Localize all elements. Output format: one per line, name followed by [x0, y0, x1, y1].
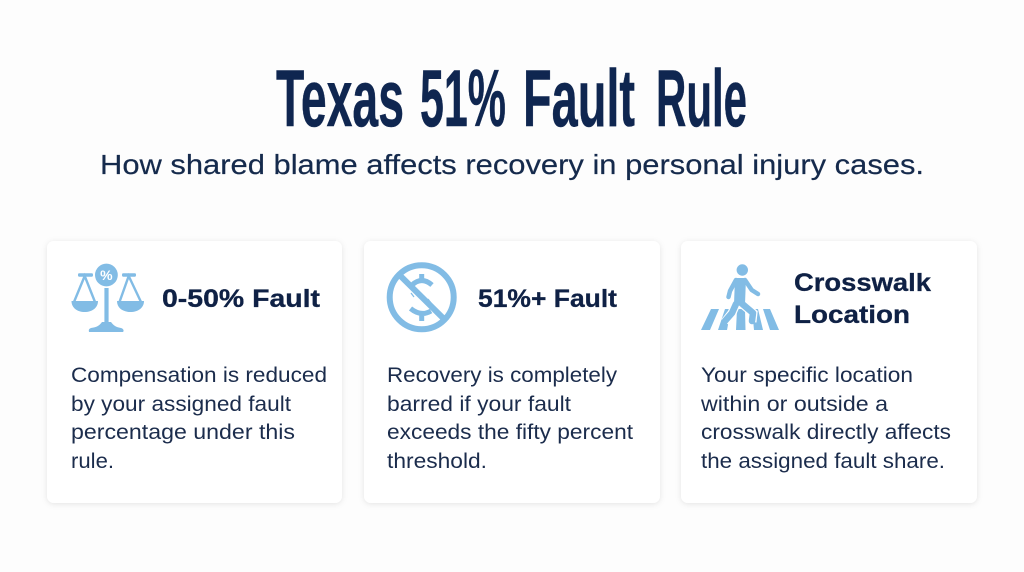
icon: scales with percent: [72, 264, 144, 332]
heading: 51%+ fault: 51%+ Fault: [478, 285, 618, 313]
heading: crosswalk location: [794, 269, 931, 329]
title: Rule: [656, 54, 747, 144]
body text: 0-50% fault: Compensation is reduced: [71, 363, 327, 387]
subtitle: How shared blame affects recovery in personal injury cases.: [100, 149, 924, 180]
body text: 51%+ fault: Recovery is completely: [387, 363, 617, 387]
body text: crosswalk location: crosswalk directly affects: [701, 420, 951, 444]
body text: crosswalk location: the assigned fault share.: [701, 449, 945, 473]
body text: 0-50% fault: percentage under this: [71, 420, 295, 444]
icon: pedestrian on crosswalk: [701, 264, 779, 330]
icon: scales with percent: %: [100, 267, 113, 283]
icon: crossed-out dollar: [390, 265, 454, 329]
panel: 51%+ fault: [364, 241, 660, 503]
body text: 0-50% fault: rule.: [71, 449, 114, 473]
title: Texas: [276, 54, 404, 144]
body text: 51%+ fault: barred if your fault: [387, 392, 571, 416]
title: [276, 54, 747, 144]
heading: crosswalk location: Crosswalk: [794, 269, 931, 297]
body text: 51%+ fault: [387, 363, 633, 473]
body text: crosswalk location: within or outside a: [700, 392, 888, 416]
heading: 0-50% fault: 0-50% Fault: [162, 285, 321, 313]
heading: crosswalk location: Location: [794, 301, 910, 329]
body text: crosswalk location: [700, 363, 951, 473]
title: Fault: [523, 54, 635, 144]
panel: crosswalk location: [681, 241, 977, 503]
body text: 51%+ fault: exceeds the fifty percent: [387, 420, 633, 444]
panel: 0-50% fault: [47, 241, 342, 503]
body text: 0-50% fault: [71, 363, 327, 473]
body text: 0-50% fault: by your assigned fault: [71, 392, 291, 416]
body text: 51%+ fault: threshold.: [387, 449, 487, 473]
title: 51%: [420, 54, 506, 144]
body text: crosswalk location: Your specific location: [701, 363, 913, 387]
